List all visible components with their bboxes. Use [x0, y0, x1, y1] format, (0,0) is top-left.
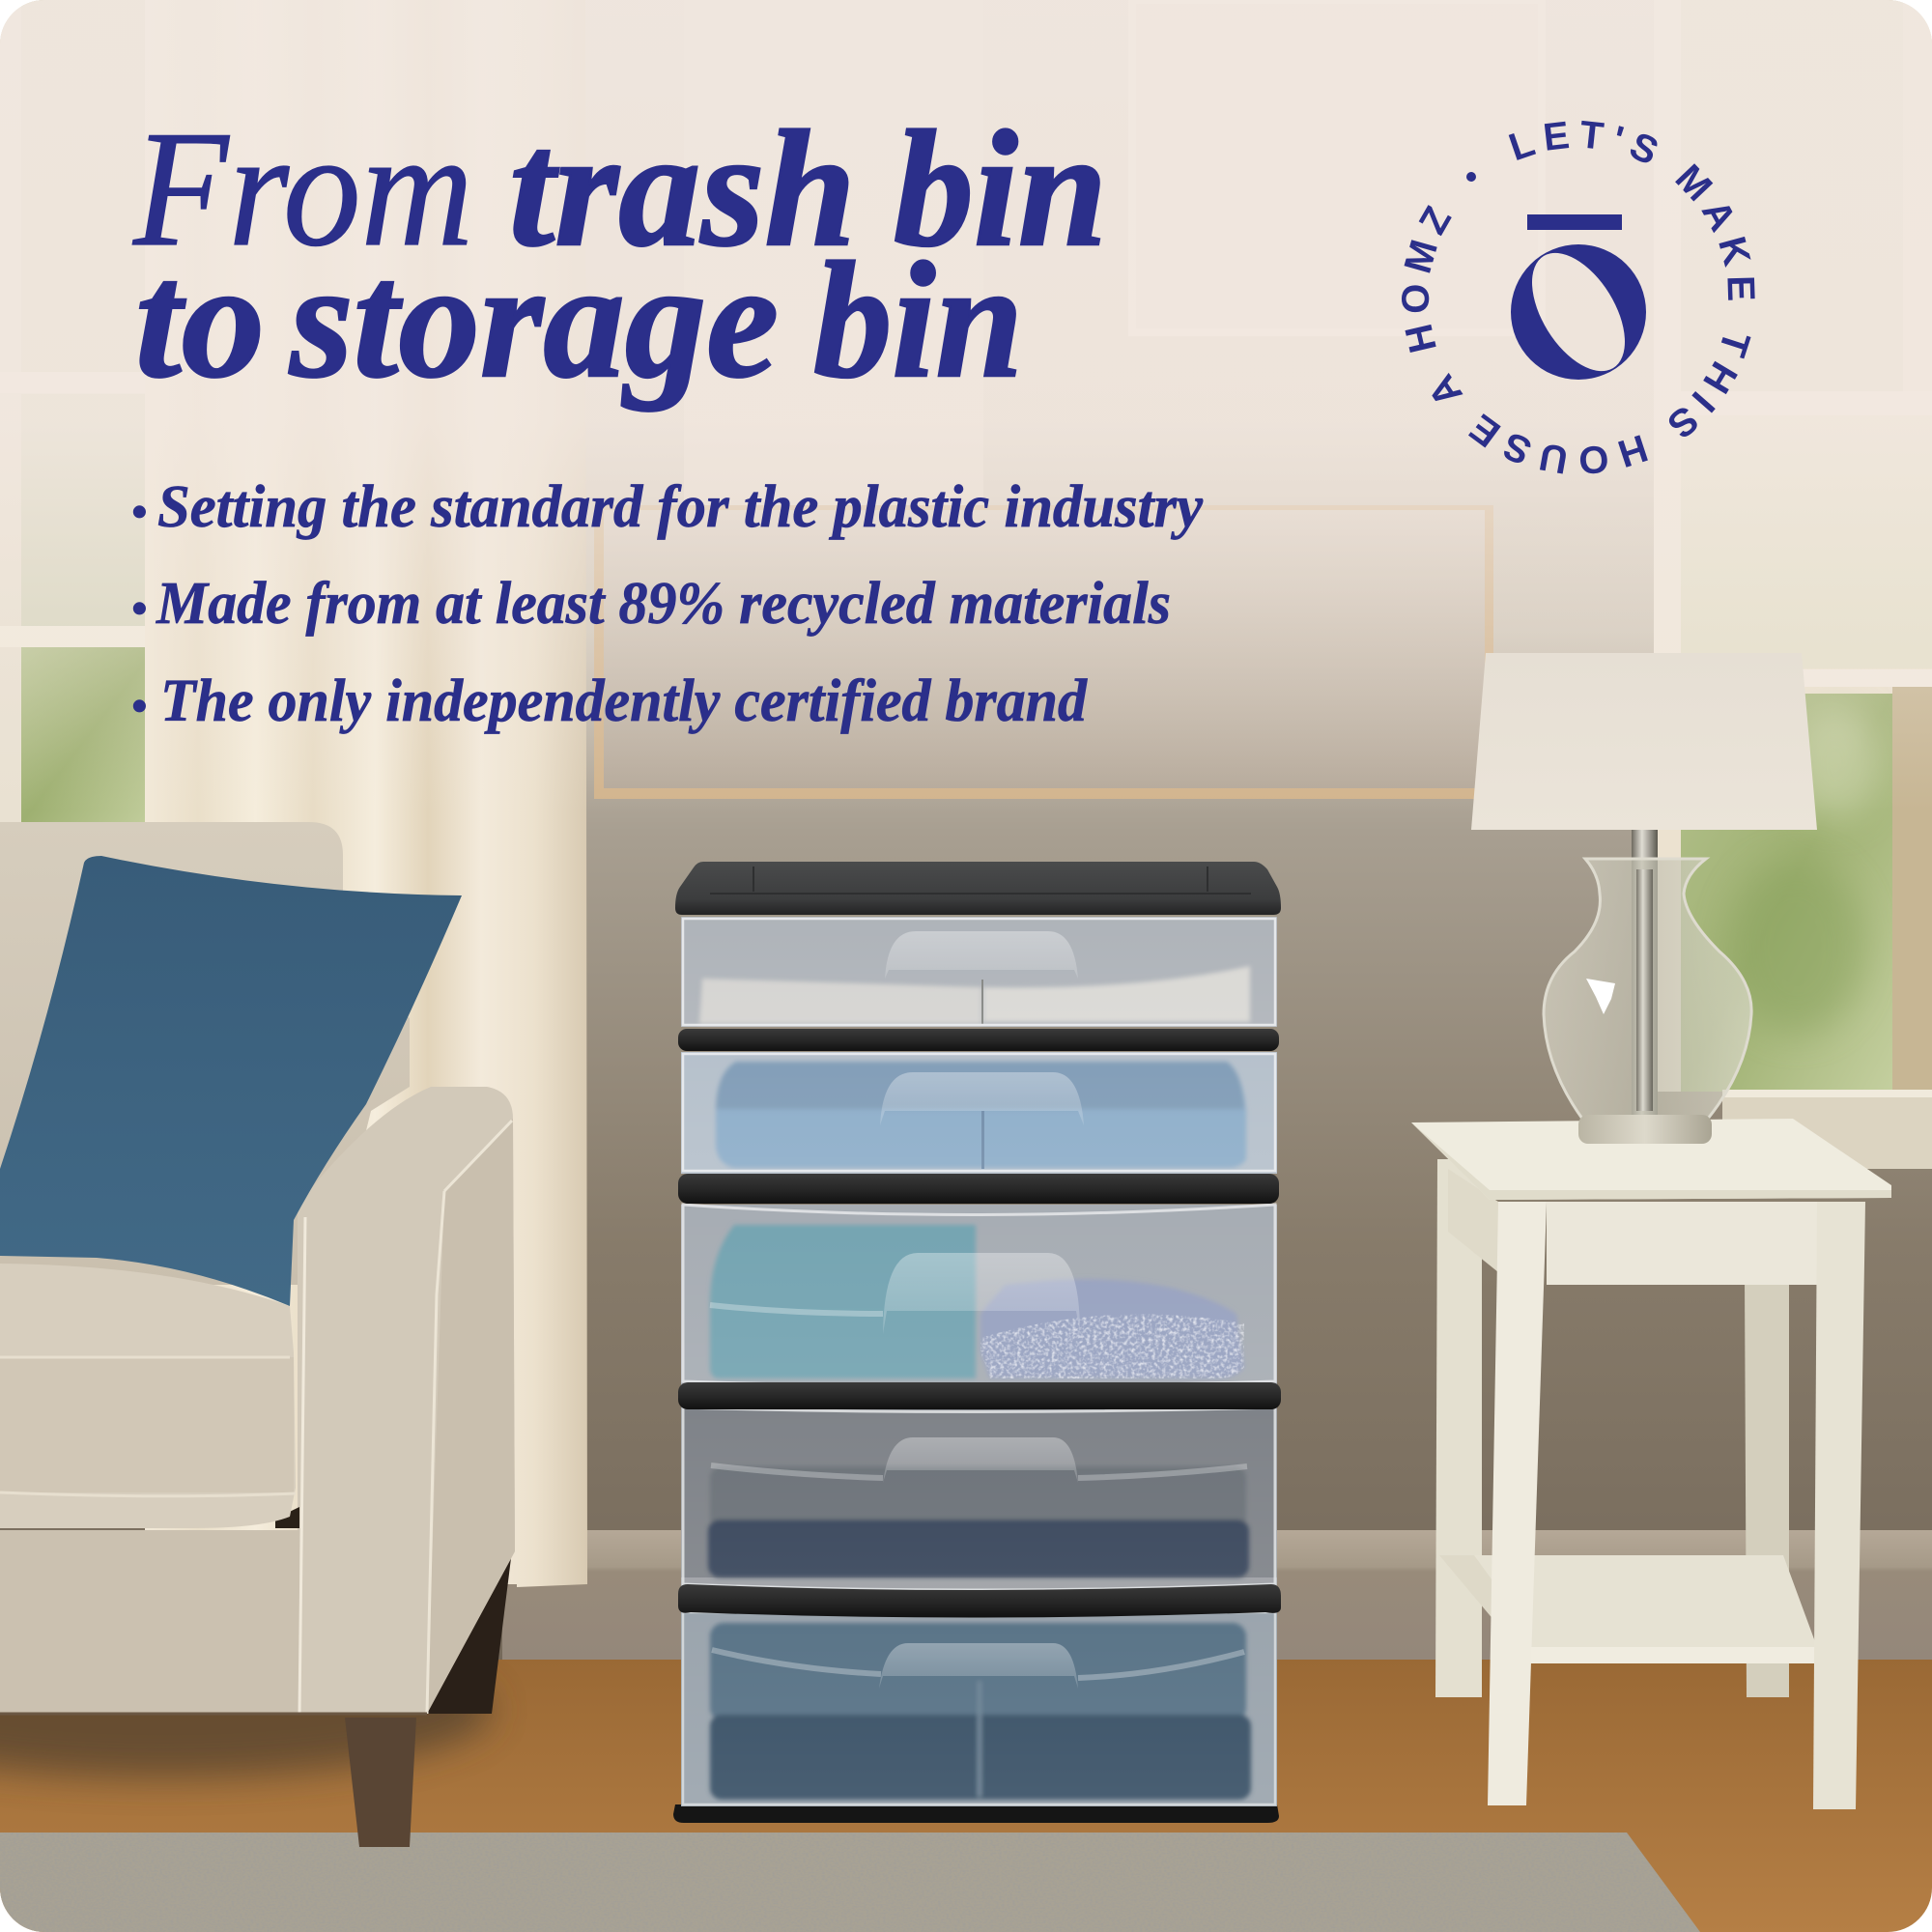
floor	[0, 1642, 1932, 1932]
drawer 5	[681, 1610, 1277, 1806]
side table	[1411, 1119, 1891, 1809]
table top	[1411, 1119, 1891, 1200]
black divider bands	[678, 1029, 1281, 1617]
table back legs	[1435, 1159, 1482, 1697]
circular slogan: LET'S MAKE THIS HOUSE A HOMZ	[1402, 120, 1755, 473]
sofa back	[0, 822, 410, 1285]
curtain	[145, 453, 587, 1587]
glass vase	[1544, 859, 1751, 1119]
logo macron bar	[1527, 214, 1622, 230]
title: bin	[813, 229, 1023, 412]
lamp base	[1578, 1115, 1712, 1144]
glass highlight	[1586, 979, 1615, 1014]
bullet 1: •	[131, 487, 147, 536]
picture frame on wall	[594, 505, 1493, 799]
sofa base	[0, 1530, 299, 1714]
table front legs	[1488, 1202, 1547, 1805]
sofa front leg	[345, 1718, 416, 1847]
right window	[1654, 0, 1932, 1169]
shadow below seat	[275, 1507, 299, 1528]
bullet 3: •	[131, 681, 147, 730]
logo letter o	[1511, 244, 1646, 380]
stem over glass	[1636, 869, 1653, 1111]
title: bin	[894, 98, 1107, 281]
sofa arm side panel	[298, 1087, 515, 1714]
circular brand badge	[1402, 120, 1755, 473]
title: storage	[289, 229, 779, 412]
bullet list	[131, 474, 1203, 734]
seat cushion	[0, 1264, 296, 1528]
white wash overlay	[0, 0, 1932, 811]
sofa	[0, 822, 515, 1847]
bullet 1: Setting the standard for the plastic industry	[157, 474, 1203, 540]
storage drawer tower	[673, 862, 1281, 1823]
rug	[0, 1833, 1700, 1932]
bullet 3: The only independently certified brand	[160, 668, 1088, 734]
table shelf	[1482, 1555, 1814, 1647]
sofa back leg	[425, 1550, 512, 1714]
tower bottom base	[673, 1804, 1279, 1823]
lamp shade	[1471, 653, 1817, 830]
badge dot	[1466, 172, 1476, 182]
drawer 4	[681, 1406, 1277, 1591]
wall paneling	[684, 0, 1542, 505]
title: From	[132, 98, 473, 281]
tower lid	[675, 862, 1281, 915]
table lamp	[1471, 653, 1817, 1144]
drawer 3	[681, 1205, 1277, 1388]
bullet 2: Made from at least 89% recycled materials	[156, 571, 1171, 637]
title: trash	[509, 98, 856, 281]
left window	[0, 0, 156, 831]
title: to	[135, 229, 265, 412]
lamp stem	[1632, 826, 1658, 1116]
drawer 2	[681, 1052, 1277, 1174]
drawer 1	[681, 917, 1277, 1027]
bullet 2: •	[131, 583, 147, 633]
pillow	[0, 856, 462, 1306]
baseboard	[502, 1530, 1932, 1660]
table apron	[1547, 1202, 1817, 1285]
